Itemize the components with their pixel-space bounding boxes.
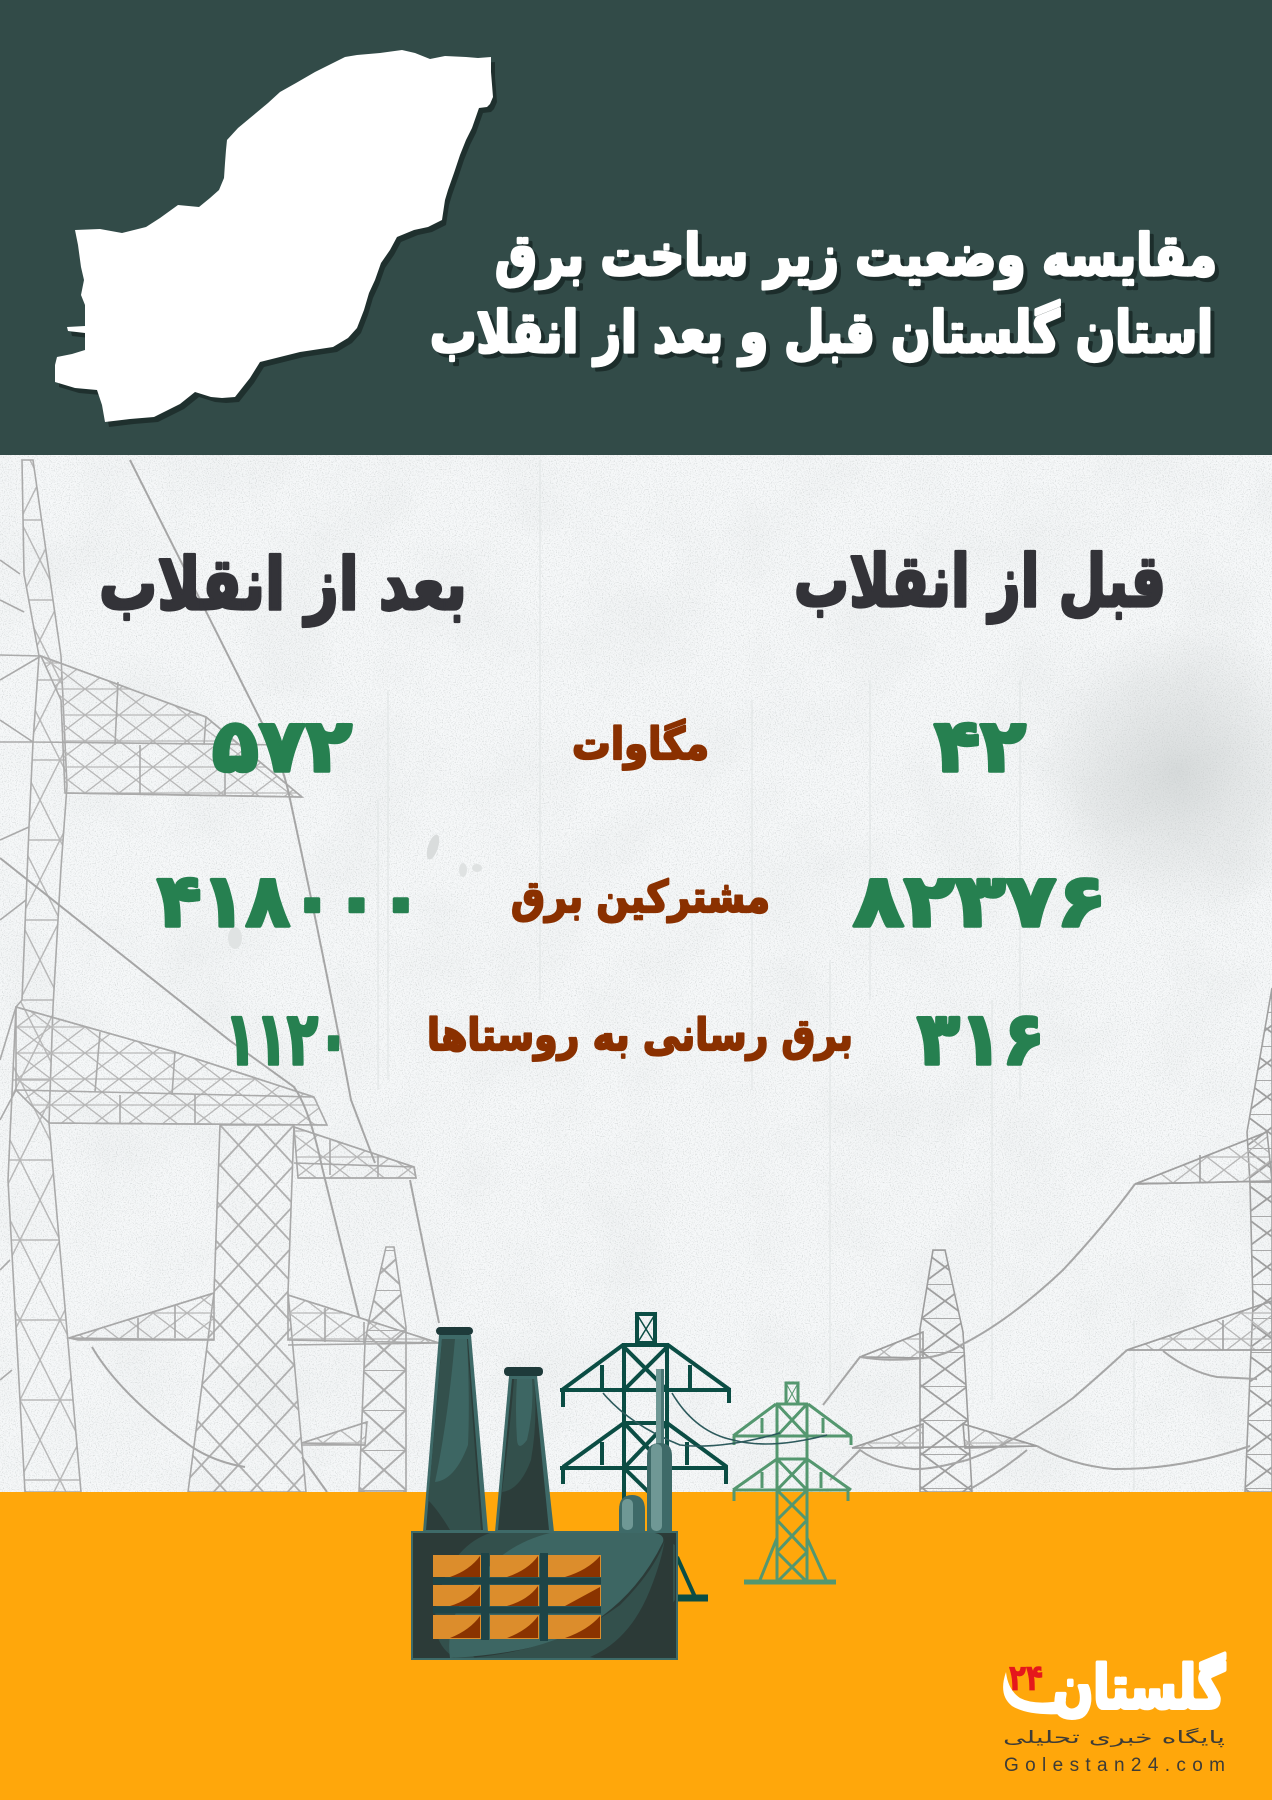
value before: ۴۲ — [934, 704, 1026, 789]
value before: ۳۱۶ — [917, 997, 1045, 1082]
chimney 1 — [423, 1327, 488, 1532]
background tower: large left — [0, 460, 327, 1492]
background tower: small behind chimney — [302, 1247, 406, 1492]
logo url: Golestan24.com — [1004, 1755, 1225, 1776]
icon: light green pylon — [733, 1383, 852, 1582]
overhead cables — [0, 460, 1257, 1492]
factory windows — [433, 1553, 601, 1641]
concrete textured background — [0, 455, 1272, 1495]
label: مگاوات — [572, 718, 709, 770]
logo: Golestan 24 — [1003, 1653, 1225, 1776]
column heading: before revolution: قبل از انقلاب — [794, 539, 1166, 624]
icon: factory — [412, 1327, 677, 1659]
background tower: right middle — [852, 1250, 1037, 1492]
map of Golestan province — [55, 50, 493, 422]
value after: ۱۱۲۰ — [225, 997, 349, 1082]
orange ground band — [0, 1492, 1272, 1800]
logo number: ۲۴ — [1009, 1658, 1043, 1699]
logo subtitle: پایگاه خبری تحلیلی — [1003, 1727, 1225, 1748]
title — [430, 223, 1217, 366]
label: برق رسانی به روستاها — [427, 1010, 853, 1061]
factory building — [412, 1532, 677, 1659]
background tower: middle — [69, 1125, 439, 1492]
pipes — [619, 1369, 672, 1532]
icon: dark green pylon — [560, 1314, 731, 1598]
value after: ۵۷۲ — [212, 704, 352, 789]
chimney 2 — [495, 1367, 554, 1532]
logo crescent — [1003, 1672, 1066, 1714]
value after: ۴۱۸۰۰۰ — [157, 859, 423, 944]
label: مشترکین برق — [511, 872, 770, 923]
value before: ۸۲۳۷۶ — [853, 859, 1107, 944]
background tower: far right — [1127, 988, 1272, 1492]
pylon cables — [603, 1393, 827, 1446]
row: village electrification — [225, 997, 1045, 1082]
row: electricity subscribers — [157, 859, 1107, 944]
logo wordmark: گلستان — [1053, 1653, 1225, 1723]
header band — [0, 0, 1272, 455]
column heading: after revolution: بعد از انقلاب — [99, 542, 467, 627]
row: megawatt — [212, 704, 1026, 789]
